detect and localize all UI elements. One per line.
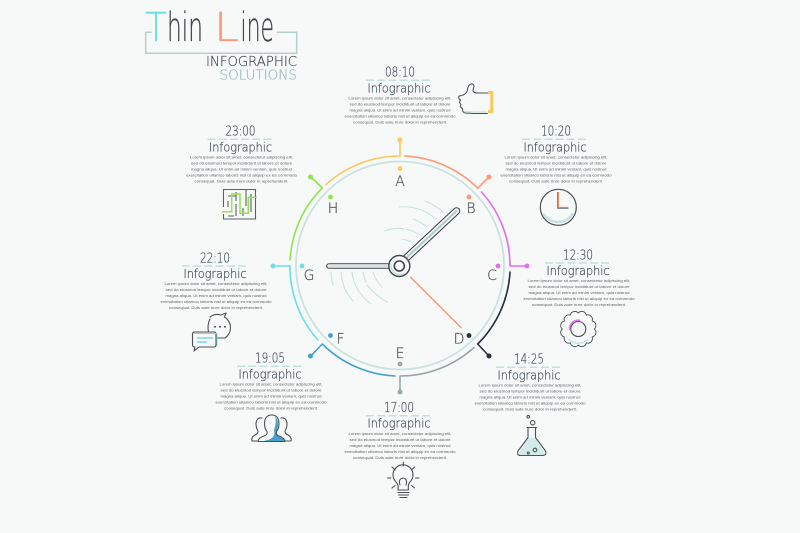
- info block G 22:10: magna aliqua. Ut enim ad minim veniam, quis nostrud: [166, 293, 266, 298]
- marker C: [487, 264, 500, 284]
- info block D 14:25: sed do eiusmod tempor incididunt ut labore et dolore: [480, 388, 581, 393]
- icon: flask: [518, 415, 546, 456]
- info block A 08:10: magna aliqua. Ut enim ad minim veniam, quis nostrud: [350, 108, 450, 113]
- info block H 23:00: [186, 125, 298, 184]
- logo subtitle SOLUTIONS: SOLUTIONS: [220, 68, 297, 84]
- info block F 19:05: exercitation ullamco laboris nisi ut aliquip ex ea commodo: [216, 399, 327, 404]
- motion swoosh lines: [331, 201, 443, 304]
- icon: people: [252, 415, 291, 442]
- info block F 19:05: 19:05: [255, 352, 285, 367]
- info block G 22:10: sed do eiusmod tempor incididunt ut labore et dolore: [166, 287, 267, 292]
- info block E 17:00: exercitation ullamco laboris nisi ut aliquip ex ea commodo: [344, 449, 456, 454]
- segment D arc: dark: [478, 272, 510, 358]
- info block H 23:00: sed do eiusmod tempor incididunt ut labore et dolore: [191, 161, 293, 166]
- info block G 22:10: consequat. Duis aute irure dolor in reprehenderit.: [169, 305, 263, 310]
- info block A 08:10: exercitation ullamco laboris nisi ut aliquip ex ea commodo: [344, 114, 456, 119]
- info block A 08:10: consequat. Duis aute irure dolor in reprehenderit.: [353, 120, 447, 125]
- inner clock ring: [296, 162, 504, 370]
- icon: speech bubbles: [192, 313, 230, 351]
- info block C 12:30: exercitation ullamco laboris nisi ut aliquip ex ea commodo: [524, 296, 635, 301]
- second hand: long: [403, 211, 456, 261]
- info block F 19:05: [216, 352, 327, 410]
- info block A 08:10: 08:10: [385, 66, 415, 81]
- marker C: C: [487, 268, 497, 284]
- info block C 12:30: 12:30: [563, 248, 593, 263]
- segment F arc: blue: [308, 344, 395, 376]
- info block F 19:05: sed do eiusmod tempor incididunt ut labore et dolore: [220, 387, 322, 392]
- info block H 23:00: consequat. Duis aute irure dolor in reprehenderit.: [195, 179, 288, 184]
- logo word Line: L: [214, 5, 239, 51]
- info block D 14:25: [474, 353, 586, 412]
- info block C 12:30: Lorem ipsum dolor sit amet, consectetur adipiscing elit,: [528, 278, 630, 283]
- info block E 17:00: [344, 401, 456, 460]
- info block H 23:00: Lorem ipsum dolor sit amet, consectetur adipiscing elit,: [190, 155, 293, 160]
- info block E 17:00: Infographic: [368, 417, 430, 432]
- logo word Line: [214, 5, 274, 51]
- info block H 23:00: 23:00: [226, 125, 256, 140]
- hour hand: [329, 263, 390, 269]
- info block F 19:05: Infographic: [238, 367, 302, 382]
- info block E 17:00: magna aliqua. Ut enim ad minim veniam, quis nostrud: [350, 443, 450, 448]
- logo word Thin: T: [145, 5, 167, 51]
- info block A 08:10: Lorem ipsum dolor sit amet, consectetur adipiscing elit,: [348, 96, 452, 101]
- info block H 23:00: exercitation ullamco laboris nisi ut aliquip ex ea commodo: [186, 173, 298, 178]
- info block B 10:20: [500, 125, 612, 184]
- info block B 10:20: sed do eiusmod tempor incididunt ut labore et dolore: [506, 161, 607, 166]
- icon: light bulb: [388, 462, 419, 498]
- minute hand: orange: [411, 277, 461, 328]
- logo word Thin: [145, 5, 203, 51]
- info block B 10:20: exercitation ullamco laboris nisi ut aliquip ex ea commodo: [500, 173, 612, 178]
- marker A: [395, 166, 405, 190]
- marker F: [328, 332, 345, 348]
- logo subtitle INFOGRAPHIC: INFOGRAPHIC: [206, 54, 297, 70]
- segment C arc: magenta: [482, 192, 530, 268]
- info block B 10:20: 10:20: [541, 125, 571, 140]
- icon: maze: [222, 190, 257, 219]
- clock diagram: [270, 138, 530, 394]
- info block G 22:10: exercitation ullamco laboris nisi ut aliquip ex ea commodo: [160, 299, 272, 304]
- info block A 08:10: Infographic: [368, 81, 430, 96]
- info block A 08:10: sed do eiusmod tempor incididunt ut labore et dolore: [350, 102, 451, 107]
- info block F 19:05: Lorem ipsum dolor sit amet, consectetur adipiscing elit,: [220, 381, 322, 386]
- info block D 14:25: Lorem ipsum dolor sit amet, consectetur adipiscing elit,: [478, 382, 582, 387]
- clock centre hub: [389, 256, 410, 276]
- info block D 14:25: 14:25: [514, 353, 544, 368]
- info block D 14:25: consequat. Duis aute irure dolor in reprehenderit.: [483, 406, 577, 411]
- info block E 17:00: sed do eiusmod tempor incididunt ut labore et dolore: [350, 437, 451, 442]
- marker D: D: [454, 332, 464, 348]
- icon: gear: [561, 311, 596, 347]
- icon: clock: [540, 189, 576, 225]
- marker D: [454, 332, 471, 348]
- info block E 17:00: consequat. Duis aute irure dolor in reprehenderit.: [353, 455, 447, 460]
- info block B 10:20: consequat. Duis aute irure dolor in reprehenderit.: [509, 179, 603, 184]
- info block G 22:10: [160, 251, 272, 310]
- logo word Line: ine: [240, 5, 274, 51]
- info block G 22:10: 22:10: [200, 251, 230, 266]
- info block A 08:10: [344, 66, 456, 124]
- marker B: B: [466, 201, 476, 217]
- marker F: F: [336, 332, 345, 348]
- segment B arc: orange: [405, 156, 492, 188]
- logo word Thin: hin: [167, 5, 203, 51]
- segment A arc: yellow: [326, 138, 402, 185]
- info block H 23:00: magna aliqua. Ut enim ad minim veniam, quis nostrud: [191, 167, 292, 172]
- info block B 10:20: magna aliqua. Ut enim ad minim veniam, quis nostrud: [506, 167, 606, 172]
- info block D 14:25: exercitation ullamco laboris nisi ut aliquip ex ea commodo: [474, 400, 586, 405]
- icon: thumbs up: [459, 84, 492, 114]
- info block C 12:30: consequat. Duis aute irure dolor in reprehenderit.: [532, 302, 626, 307]
- info block C 12:30: sed do eiusmod tempor incididunt ut labore et dolore: [528, 284, 630, 289]
- segment G arc: cyan: [270, 264, 318, 340]
- info block B 10:20: Infographic: [524, 140, 586, 155]
- info block H 23:00: Infographic: [209, 140, 272, 155]
- marker E: E: [396, 346, 404, 362]
- segment E arc: gray: [398, 348, 474, 394]
- info block G 22:10: Lorem ipsum dolor sit amet, consectetur adipiscing elit,: [164, 281, 268, 286]
- info block B 10:20: Lorem ipsum dolor sit amet, consectetur adipiscing elit,: [504, 155, 608, 160]
- info block F 19:05: magna aliqua. Ut enim ad minim veniam, quis nostrud: [220, 393, 322, 398]
- segment H arc: green: [290, 174, 322, 260]
- info block D 14:25: Infographic: [498, 368, 560, 383]
- logo: Thin Line: [145, 5, 297, 84]
- info block D 14:25: magna aliqua. Ut enim ad minim veniam, quis nostrud: [480, 394, 580, 399]
- info block E 17:00: 17:00: [384, 401, 414, 416]
- marker A: A: [395, 174, 405, 190]
- info block E 17:00: Lorem ipsum dolor sit amet, consectetur adipiscing elit,: [348, 431, 452, 436]
- info block F 19:05: consequat. Duis aute irure dolor in reprehenderit.: [224, 405, 318, 410]
- info block C 12:30: magna aliqua. Ut enim ad minim veniam, quis nostrud: [528, 290, 630, 295]
- marker G: [300, 264, 314, 284]
- marker H: H: [328, 201, 338, 217]
- marker G: G: [304, 268, 314, 284]
- info block C 12:30: Infographic: [546, 264, 610, 279]
- info block G 22:10: Infographic: [184, 267, 246, 282]
- info block C 12:30: [524, 248, 635, 307]
